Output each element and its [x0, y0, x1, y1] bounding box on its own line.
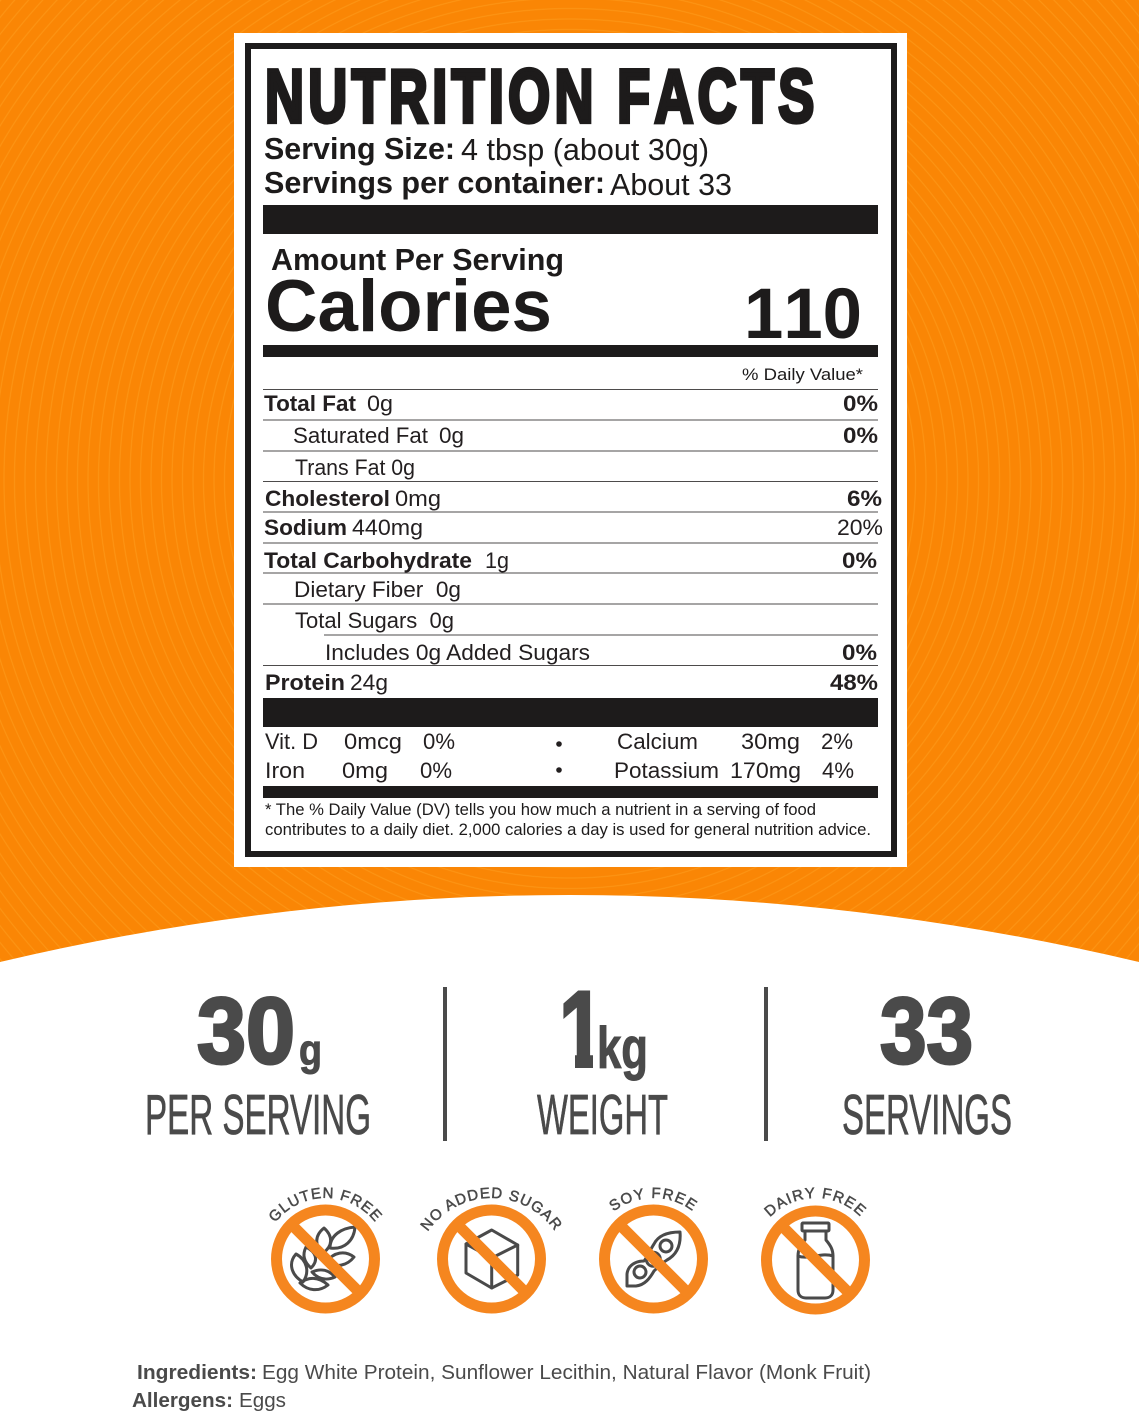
vitamins row 1: 2% [821, 729, 853, 754]
stat: 33 servings [842, 978, 1012, 1147]
ingredients: Egg White Protein, Sunflower Lecithin, Natural Flavor (Monk Fruit) [262, 1362, 871, 1384]
row: total carbohydrate [264, 548, 877, 573]
icon: sugar cube [466, 1230, 518, 1288]
serving size: Serving Size: [264, 131, 455, 166]
badge: no added sugar [420, 1187, 562, 1314]
allergens: Eggs [239, 1390, 286, 1412]
row: sodium: Sodium [264, 515, 347, 540]
row: total sugars: Total Sugars 0g [295, 608, 454, 633]
serving size [264, 131, 709, 167]
row: cholesterol [265, 486, 882, 511]
panel: nutrition facts label [234, 33, 907, 867]
vitamins row 1: Calcium [617, 729, 698, 754]
vitamins row 2: 4% [822, 758, 854, 783]
servings per container: About 33 [610, 167, 732, 202]
allergens: Allergens: [132, 1390, 233, 1412]
stat: 30g per serving [145, 978, 371, 1147]
stat: 1kg weight [536, 990, 668, 1135]
row: protein [265, 670, 878, 695]
servings per container: Servings per container: [264, 165, 605, 200]
icon: milk bottle [798, 1223, 833, 1298]
white curved lower section [0, 895, 1139, 1414]
servings per container [264, 165, 732, 202]
badge: gluten free [270, 1187, 382, 1314]
row: protein: Protein [265, 670, 345, 695]
vitamins row 1: 0% [423, 729, 455, 754]
stat: 30g per serving: 30 [197, 978, 295, 1083]
badge: soy free: SOY FREE [609, 1187, 698, 1211]
vitamins row 2: Iron [265, 758, 305, 783]
divider [443, 987, 447, 1141]
vitamins row 2: 0mg [342, 758, 388, 783]
stat: 1kg weight: 1 [559, 969, 604, 1092]
row: saturated fat: 0% [843, 423, 878, 448]
row: total fat: 0g [367, 391, 393, 416]
calories bar [263, 345, 878, 357]
top black bar [263, 205, 878, 234]
stat: 1kg weight: WEIGHT [537, 1083, 668, 1147]
calories label: Calories [265, 266, 552, 347]
row: saturated fat [293, 423, 878, 448]
thin black bar [263, 786, 878, 798]
footnote [265, 800, 871, 839]
amount per serving: Amount Per Serving [271, 242, 564, 277]
badge: gluten free: GLUTEN FREE [270, 1187, 382, 1222]
orange ripple background [0, 0, 1139, 980]
row: saturated fat: Saturated Fat [293, 423, 428, 448]
icon: soybean pod [627, 1232, 680, 1286]
vitamins row 1 [265, 729, 853, 754]
row: cholesterol: 0mg [395, 486, 441, 511]
badge: dairy free [761, 1187, 870, 1314]
row: cholesterol: 6% [847, 486, 882, 511]
row: added sugars [325, 640, 877, 665]
stat: 33 servings: SERVINGS [842, 1083, 1012, 1147]
allergens [132, 1390, 286, 1412]
row: total carbohydrate: 0% [842, 548, 877, 573]
badge: dairy free: DAIRY FREE [764, 1187, 867, 1217]
row: total fat: 0% [843, 391, 878, 416]
vitamins row 1: 0mcg [344, 729, 402, 754]
row: cholesterol: Cholesterol [265, 486, 390, 511]
row: added sugars: Includes 0g Added Sugars [325, 640, 590, 665]
lower black bar [263, 698, 878, 727]
row: total fat: Total Fat [264, 391, 357, 416]
row: sodium: 20% [837, 515, 883, 540]
row: sodium [264, 515, 883, 540]
row: protein: 24g [350, 670, 388, 695]
calories value: 110 [744, 275, 862, 354]
stat: 30g per serving: PER SERVING [145, 1083, 371, 1147]
row: trans fat: Trans Fat 0g [295, 455, 415, 480]
divider [764, 987, 768, 1141]
footnote: * The % Daily Value (DV) tells you how much a nutrient in a serving of food [265, 800, 816, 819]
serving size: 4 tbsp (about 30g) [461, 132, 709, 167]
row: protein: 48% [830, 670, 878, 695]
row: dietary fiber: Dietary Fiber 0g [294, 577, 461, 602]
vitamins row 1: 30mg [741, 729, 800, 754]
stat: 30g per serving: g [299, 1026, 322, 1075]
stat: 1kg weight: kg [597, 1016, 648, 1081]
row: total carbohydrate: Total Carbohydrate [264, 548, 472, 573]
daily value heading: % Daily Value* [742, 365, 863, 384]
vitamins row 2: Potassium [614, 758, 719, 783]
vitamins row 2: 0% [420, 758, 452, 783]
row: total carbohydrate: 1g [485, 548, 509, 573]
nutrient table [263, 390, 883, 695]
footnote: contributes to a daily diet. 2,000 calories a day is used for general nutrition advice. [265, 820, 871, 839]
title: NUTRITION FACTS [265, 54, 819, 138]
row: added sugars: 0% [842, 640, 877, 665]
ingredients: Ingredients: [137, 1362, 257, 1384]
row: sodium: 440mg [352, 515, 423, 540]
badge: soy free [599, 1187, 708, 1314]
badge: no added sugar: NO ADDED SUGAR [420, 1187, 562, 1232]
row: saturated fat: 0g [439, 423, 464, 448]
vitamins row 2 [265, 758, 854, 783]
icon: wheat [292, 1227, 355, 1290]
row: total fat [264, 391, 878, 416]
vitamins row 1: Vit. D [265, 729, 318, 754]
vitamins row 2: 170mg [730, 758, 801, 783]
stat: 33 servings: 33 [880, 978, 973, 1083]
